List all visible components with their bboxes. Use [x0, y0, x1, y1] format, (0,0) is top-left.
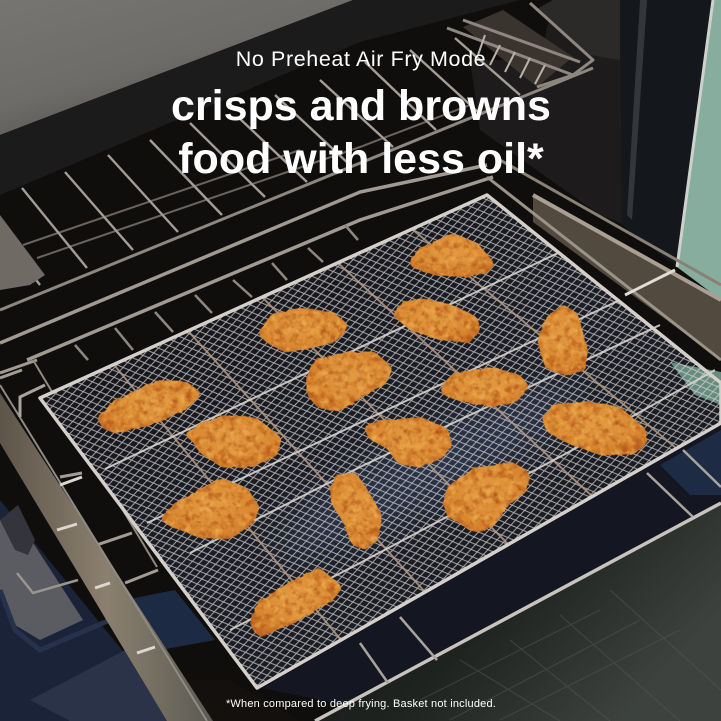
basket cross bars: [115, 229, 676, 640]
wing 7: [97, 380, 202, 434]
wing 4: [537, 304, 588, 376]
wing 11: [160, 478, 260, 540]
grey recess: [0, 515, 83, 640]
footnote: *When compared to deep frying. Basket not included.: [226, 698, 496, 710]
oven ceiling wall: [0, 0, 353, 135]
lower handle: [17, 573, 78, 593]
enamel under basket: [125, 590, 215, 650]
left side lower rods: [0, 370, 158, 583]
door frame edge: [677, 0, 713, 267]
basket base: [40, 195, 721, 688]
slide rail tabs: [57, 477, 155, 653]
teal reflection: [670, 362, 721, 405]
wing 10: [542, 401, 647, 455]
subtitle: No Preheat Air Fry Mode: [236, 47, 486, 71]
title: [171, 82, 551, 183]
glass rack reflections: [420, 590, 721, 721]
upper rack grille: [447, 3, 593, 87]
glass upper band: [262, 423, 721, 705]
air fry basket: [40, 195, 721, 688]
wing 2: [257, 308, 349, 353]
side wall top highlight: [535, 0, 620, 60]
basket frame: [40, 195, 721, 688]
jamb streak: [627, 0, 647, 220]
wing 1: [408, 233, 495, 277]
blue floor reflections: [277, 376, 583, 564]
lower front rod: [315, 503, 721, 721]
lower cross rods: [360, 450, 721, 683]
wing 12: [330, 472, 382, 550]
wing 5: [306, 352, 393, 412]
title: crisps and browns: [171, 82, 551, 130]
bottom left enamel cavity: [0, 500, 220, 721]
basket mesh: [40, 195, 721, 688]
enamel floor: [30, 645, 210, 721]
exterior wall: [677, 0, 721, 300]
left slide wire: [0, 360, 207, 721]
main oven rack: [0, 165, 493, 373]
side wall: [470, 0, 625, 225]
basket long bars: [105, 252, 715, 630]
right side slide rails: [487, 160, 721, 360]
right side slide plate: [533, 195, 721, 360]
wing 13: [443, 462, 530, 533]
recess rim: [0, 590, 110, 650]
wing 3: [392, 298, 481, 343]
recess slot: [0, 505, 35, 555]
wing 14: [250, 568, 343, 637]
dark wall band: [0, 0, 520, 195]
door jamb: [620, 0, 713, 267]
wing 6: [440, 367, 530, 407]
left slide rail: [0, 393, 213, 721]
wing 8: [184, 415, 282, 468]
rack side bracket: [0, 215, 45, 290]
upper oven rack: [0, 38, 593, 310]
wing 9: [363, 417, 453, 468]
bottom right glass door: [315, 503, 721, 721]
title: food with less oil*: [178, 135, 544, 183]
bottom centre cavity: [180, 680, 300, 721]
enamel right corner: [660, 430, 721, 495]
basket handle: [20, 385, 45, 417]
